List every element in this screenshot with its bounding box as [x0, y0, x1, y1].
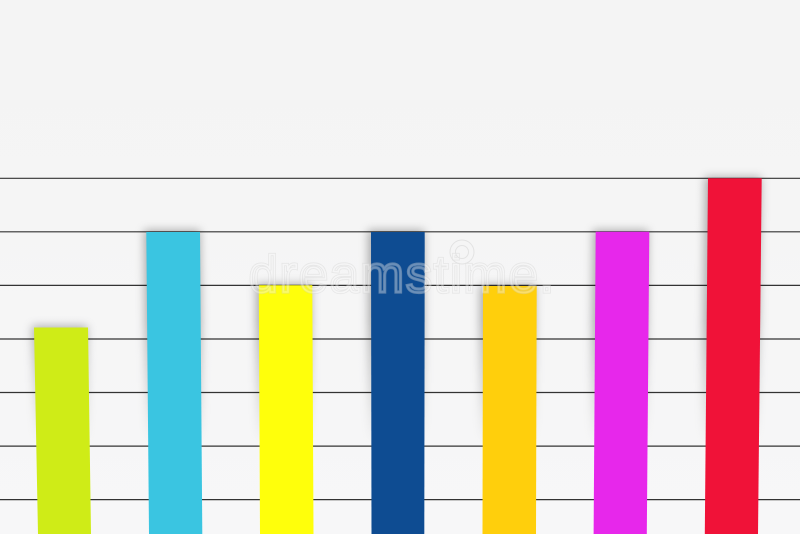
bar chart [0, 171, 800, 534]
bar 7: red [705, 178, 762, 534]
bar 6: magenta [594, 232, 649, 534]
watermark: dreamstime. [249, 246, 554, 304]
watermark: dreamstime. [249, 246, 554, 304]
bar shadows [27, 172, 766, 426]
bar 5: amber [482, 286, 537, 534]
grid lines [0, 178, 800, 500]
bar 1: lime [34, 328, 91, 534]
bar 3: yellow [259, 285, 314, 534]
bar 4: navy [371, 232, 425, 534]
bar 2: sky blue [146, 232, 202, 534]
